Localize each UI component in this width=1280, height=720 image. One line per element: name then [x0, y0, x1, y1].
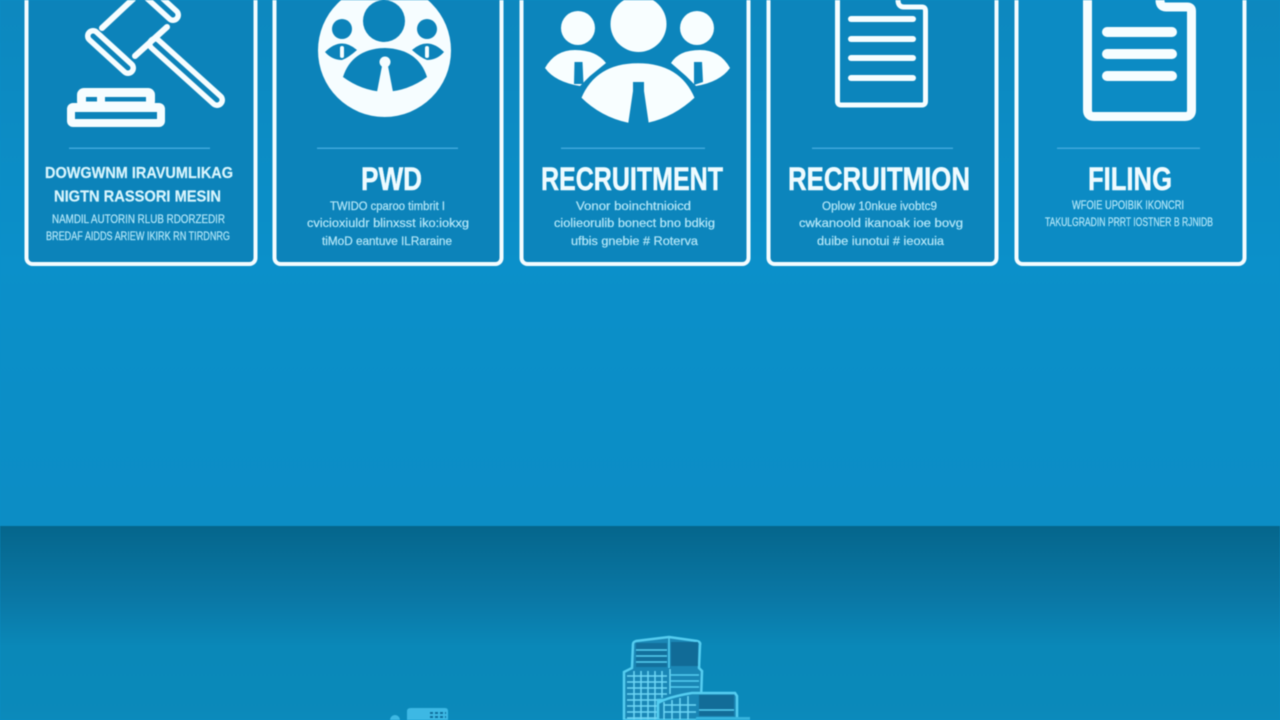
body text: card 3: ciolieorulib bonect bno bdkig: [554, 218, 715, 230]
body text: card 1: [46, 214, 230, 243]
body text: card 4: Oplow 10nkue ivobtc9: [822, 201, 937, 213]
heading: RECRUITMENT: RECRUITMENT: [541, 161, 723, 197]
card 3: recruitment: [522, 0, 748, 264]
icon: small building: [390, 708, 448, 720]
body text: card 4: [799, 201, 963, 248]
heading: card 1: [45, 165, 233, 206]
icon: filing document: [1088, 0, 1192, 116]
illustration: city skyline: [390, 637, 750, 720]
icon: three people: [545, 0, 730, 125]
card 4: recruitmion: [768, 0, 996, 264]
body text: card 5: WFOIE UPOIBIK IKONCRI: [1072, 200, 1184, 212]
body text: card 2: TWIDO cparoo timbrit I: [330, 201, 445, 213]
body text: card 4: cwkanoold ikanoak ioe bovg: [799, 218, 963, 230]
body text: card 1: BREDAF AIDDS ARIEW IKIRK RN TIRDNRG: [46, 231, 230, 243]
body text: card 4: duibe iunotui # ieoxuia: [817, 236, 945, 248]
body text: card 2: cvicioxiuldr blinxsst iko:iokxg: [307, 218, 469, 230]
card 5: filing: [1016, 0, 1244, 264]
body text: card 2: tiMoD eantuve ILRaraine: [322, 236, 452, 248]
body text: card 3: ufbis gnebie # Roterva: [571, 236, 699, 248]
card 2: PWD: [274, 0, 502, 264]
body text: card 1: NAMDIL AUTORIN RLUB RDORZEDIR: [52, 214, 225, 226]
icon: document: [838, 0, 926, 105]
body text: card 2: [307, 201, 469, 248]
heading: RECRUITMION: RECRUITMION: [788, 161, 970, 197]
heading: card 1: NIGTN RASSORI MESIN: [54, 188, 221, 206]
icon: group in circle: [318, 0, 451, 117]
body text: card 3: Vonor boinchtnioicd: [576, 201, 691, 213]
card 1: document gavel: [26, 0, 256, 264]
icon: gavel: [67, 0, 217, 127]
heading: PWD: PWD: [361, 161, 422, 197]
icon: lower block: [658, 693, 750, 720]
heading: FILING: FILING: [1088, 161, 1172, 197]
body text: card 5: TAKULGRADIN PRRT IOSTNER B RJNIDB: [1045, 217, 1213, 229]
upper background panel: [0, 0, 1280, 526]
body text: card 3: [554, 201, 715, 248]
heading: card 1: DOWGWNM IRAVUMLIKAG: [45, 165, 233, 182]
icon: tall tower: [624, 637, 702, 720]
lower background band: [0, 526, 1280, 720]
body text: card 5: [1045, 200, 1213, 229]
